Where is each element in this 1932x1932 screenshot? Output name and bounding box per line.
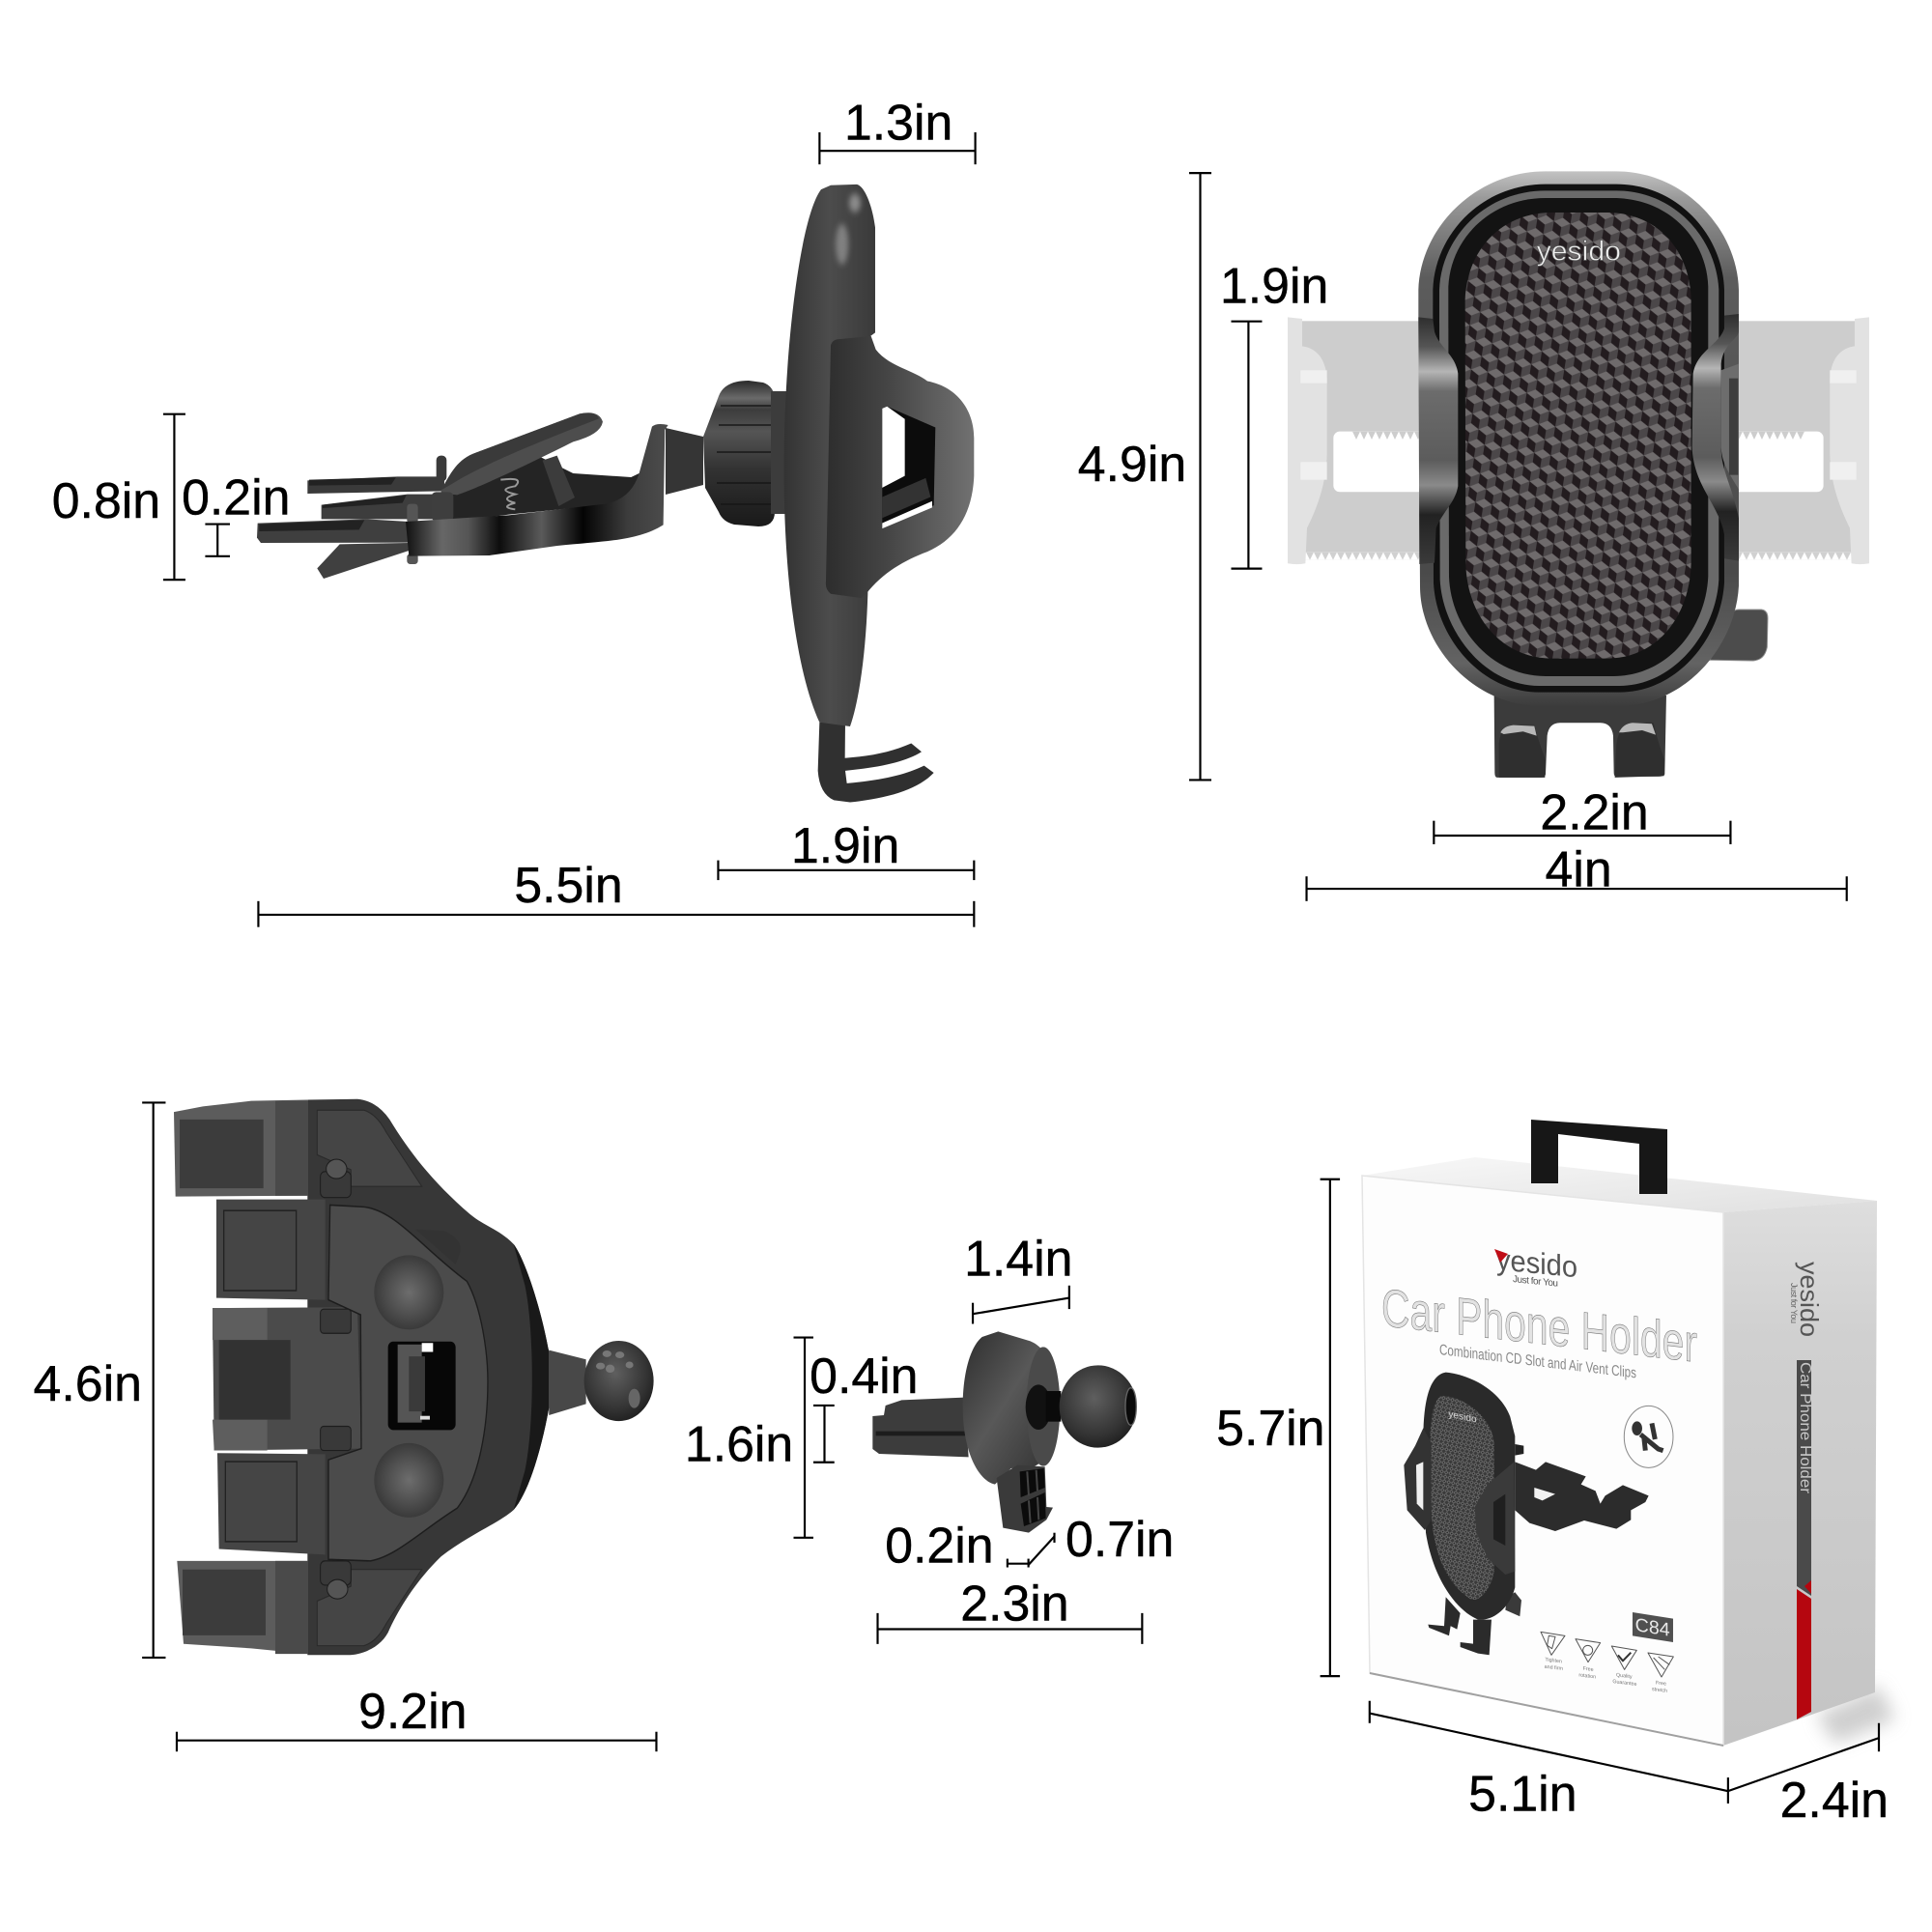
side stripe label: Car Phone Holder [1797, 1362, 1813, 1494]
feature labels: Free [1583, 1666, 1594, 1673]
CD clamp assembly [257, 412, 668, 579]
dimension: 5.5in: 5.5in [514, 857, 623, 913]
legs [1428, 1597, 1492, 1655]
outer shell [1418, 171, 1739, 706]
feature labels: Guarantee [1612, 1679, 1637, 1688]
dimension: 0.2in clip [182, 469, 290, 556]
ball with hole [1060, 1365, 1137, 1448]
prong bottom [177, 1561, 307, 1654]
feature labels: Tighten [1545, 1657, 1562, 1664]
product: CD slot clip [174, 1099, 654, 1655]
model and feature icons [1541, 1612, 1673, 1694]
dimension: 2.4in [1728, 1723, 1889, 1828]
dimension: 1.3in: 1.3in [844, 95, 952, 151]
front face [1362, 1176, 1723, 1746]
product: front view holder [1288, 171, 1869, 778]
side face [1723, 1201, 1877, 1746]
dimension: 2.2in: 2.2in [1540, 784, 1649, 840]
base plate [307, 1099, 549, 1655]
clip arm [872, 1398, 969, 1457]
rubber pad [1448, 198, 1708, 676]
lower foot [997, 1465, 1053, 1533]
inner prongs [213, 1200, 361, 1554]
front logo: yesido [1496, 1242, 1577, 1284]
dimension: 4.6in: 4.6in [34, 1355, 142, 1411]
ball [584, 1341, 654, 1421]
mini window [1416, 1462, 1423, 1510]
mini logo: yesido [1448, 1409, 1477, 1426]
side tagline: Just for You [1789, 1283, 1799, 1323]
dimension: 1.4in [964, 1231, 1072, 1323]
dimension: 9.2in: 9.2in [358, 1683, 467, 1739]
prong top [174, 1099, 307, 1197]
dimension: 1.4in: 1.4in [964, 1231, 1072, 1287]
dimension: 0.7in: 0.7in [1065, 1511, 1174, 1567]
side stripe gray [1797, 1360, 1811, 1596]
top face [1362, 1157, 1877, 1212]
feature triangles [1541, 1632, 1673, 1677]
product picture on box [1404, 1373, 1673, 1655]
side stripe red [1797, 1589, 1811, 1719]
mini carbon [1431, 1396, 1494, 1600]
window [388, 1342, 456, 1430]
dimension: 4in: 4in [1546, 840, 1612, 896]
dimension: 2.4in: 2.4in [1780, 1772, 1889, 1828]
neck and knob [666, 381, 794, 526]
logo on panel: yesido [1537, 236, 1621, 267]
mini slot [1493, 1494, 1505, 1546]
box subtitle: Combination CD Slot and Air Vent Clips [1439, 1342, 1636, 1381]
product: vent clip [872, 1331, 1137, 1533]
product: side view holder [257, 185, 974, 803]
ghost extension left [1288, 317, 1425, 564]
feature labels [1545, 1657, 1667, 1694]
box title: Car Phone Holder [1381, 1277, 1697, 1374]
bumps [374, 1255, 443, 1329]
model code: C84 [1635, 1614, 1670, 1641]
mini body [1423, 1373, 1515, 1620]
mini left grip [1404, 1428, 1432, 1530]
dimension: 0.8in: 0.8in [52, 472, 160, 528]
logo accent [1494, 1249, 1508, 1263]
dimension: 1.6in: 1.6in [685, 1415, 793, 1471]
handle [1531, 1120, 1667, 1194]
feature labels: Free [1656, 1680, 1666, 1688]
dimension: 5.1in [1370, 1701, 1728, 1822]
dimension: 5.7in: 5.7in [1216, 1400, 1324, 1456]
side logo: yesido [1795, 1262, 1824, 1337]
dimension: 4.9in: 4.9in [1078, 436, 1186, 492]
phone cradle back [784, 185, 974, 803]
black inner ring [1433, 185, 1724, 693]
feature labels: Quality [1616, 1672, 1633, 1680]
dimension: 0.4in: 0.4in [810, 1348, 918, 1404]
ball neck [549, 1350, 586, 1415]
front tagline: Just for You [1513, 1274, 1558, 1290]
dimension: 1.9in grip: 1.9in [1220, 258, 1328, 314]
feature labels: stretch [1652, 1687, 1667, 1694]
circle inset [1624, 1406, 1673, 1467]
dimension: 5.1in: 5.1in [1468, 1766, 1577, 1822]
dimension: 0.2in vent: 0.2in [885, 1517, 994, 1573]
clip behind [1515, 1462, 1649, 1531]
center plate [328, 1205, 488, 1561]
mini right grip [1475, 1462, 1515, 1575]
model badge [1633, 1612, 1673, 1642]
dimension: 1.9in depth: 1.9in [791, 817, 899, 873]
disc face [1027, 1347, 1060, 1466]
feature labels: and firm [1545, 1664, 1563, 1672]
bottom hooks [1494, 696, 1666, 778]
carbon fibre panel [1465, 213, 1691, 659]
disc [963, 1331, 1060, 1485]
side stripe accent [1804, 1580, 1811, 1594]
side grip left [1418, 317, 1458, 564]
product: retail box [1362, 1120, 1895, 1746]
side grip right [1692, 314, 1739, 561]
dimension: 0.4in [810, 1348, 918, 1463]
dimension: 2.3in: 2.3in [960, 1576, 1069, 1632]
front bottom edge [1370, 1673, 1723, 1746]
release tab [1710, 610, 1768, 661]
lever [1505, 1592, 1521, 1616]
dimension: 0.2in clip: 0.2in [182, 469, 290, 525]
ghost extension right [1732, 317, 1869, 564]
hinges [321, 1159, 351, 1599]
stem [1026, 1384, 1061, 1430]
feature labels: rotation [1578, 1672, 1596, 1680]
ground shadow [1816, 1686, 1895, 1744]
